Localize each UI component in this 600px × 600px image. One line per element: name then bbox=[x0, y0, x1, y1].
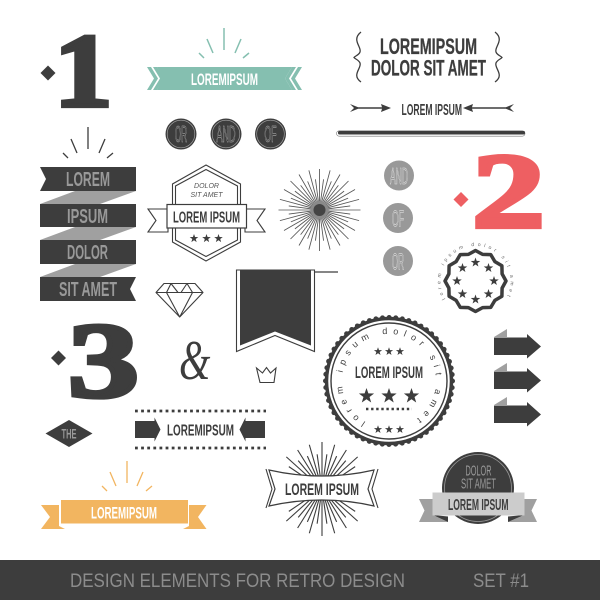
dark circle labels bbox=[166, 118, 286, 150]
dark circle labels: OR bbox=[175, 121, 187, 147]
orange rays bbox=[102, 461, 152, 491]
teal rays bbox=[199, 28, 249, 58]
stacked arrows bbox=[494, 329, 541, 426]
hanging flag bbox=[236, 270, 338, 352]
THE diamond: THE bbox=[62, 426, 76, 442]
dark stacked ribbon: LOREM bbox=[66, 169, 110, 191]
dark stacked ribbon: SIT AMET bbox=[59, 279, 117, 301]
text: AND bbox=[390, 163, 408, 189]
number 2: 2 bbox=[472, 132, 545, 250]
diamond gem icon bbox=[156, 284, 203, 317]
orange ribbon banner bbox=[41, 461, 206, 529]
heading with braces bbox=[354, 32, 502, 82]
teal ribbon banner bbox=[147, 28, 302, 90]
hexagon badge: LOREM IPSUM bbox=[173, 210, 240, 226]
large round seal: LOREM IPSUM bbox=[355, 364, 423, 382]
grey circle labels bbox=[383, 160, 414, 276]
burst ribbon badge bbox=[266, 442, 378, 536]
THE diamond bbox=[46, 420, 92, 447]
rays above stack bbox=[63, 127, 113, 158]
round badge with grey ribbon: DOLOR bbox=[466, 464, 492, 480]
dark stacked ribbon bbox=[40, 127, 136, 301]
hexagon ribbon tails bbox=[148, 209, 265, 232]
arrow divider with label bbox=[336, 102, 525, 136]
burst ribbon badge: LOREM IPSUM bbox=[285, 480, 359, 499]
dark circle labels: AND bbox=[216, 121, 236, 147]
large round seal bbox=[323, 315, 455, 447]
round badge with grey ribbon: SIT AMET bbox=[461, 476, 496, 492]
dark circle labels: OF bbox=[264, 121, 276, 147]
footer bar: DESIGN ELEMENTS FOR RETRO DESIGN bbox=[70, 571, 405, 592]
sunburst bbox=[278, 169, 360, 251]
heading with braces: DOLOR SIT AMET bbox=[371, 56, 486, 80]
hexagon badge bbox=[148, 165, 265, 261]
dark stacked ribbon: IPSUM bbox=[67, 206, 108, 228]
small star seal: lorem ipsum dolor sit amet bbox=[438, 242, 514, 300]
large round seal: lorem ipsum dolor sit amet bbox=[336, 328, 442, 427]
teal ribbon banner: LOREMIPSUM bbox=[191, 70, 258, 89]
number 1: 1 bbox=[54, 13, 112, 130]
hexagon badge: DOLOR bbox=[194, 183, 219, 190]
crown icon bbox=[256, 368, 276, 382]
dark stacked ribbon: DOLOR bbox=[67, 242, 108, 264]
number 3: 3 bbox=[68, 302, 139, 420]
dotted arrow label bbox=[135, 411, 266, 448]
round badge with grey ribbon: LOREM IPSUM bbox=[448, 497, 508, 514]
footer bar: SET #1 bbox=[473, 571, 529, 592]
heading with braces: LOREMIPSUM bbox=[380, 34, 477, 59]
dotted arrow label: LOREMIPSUM bbox=[167, 422, 234, 440]
ampersand: & bbox=[179, 330, 210, 392]
burst rays bbox=[286, 442, 358, 536]
footer bar bbox=[0, 560, 600, 600]
grey circle labels: OF bbox=[392, 206, 404, 232]
orange ribbon banner: LOREMIPSUM bbox=[91, 504, 157, 522]
grey circle labels: OR bbox=[392, 248, 404, 274]
round badge with grey ribbon bbox=[419, 452, 537, 524]
arrow divider with label: LOREM IPSUM bbox=[402, 102, 462, 119]
hexagon badge: SIT AMET bbox=[190, 192, 223, 199]
